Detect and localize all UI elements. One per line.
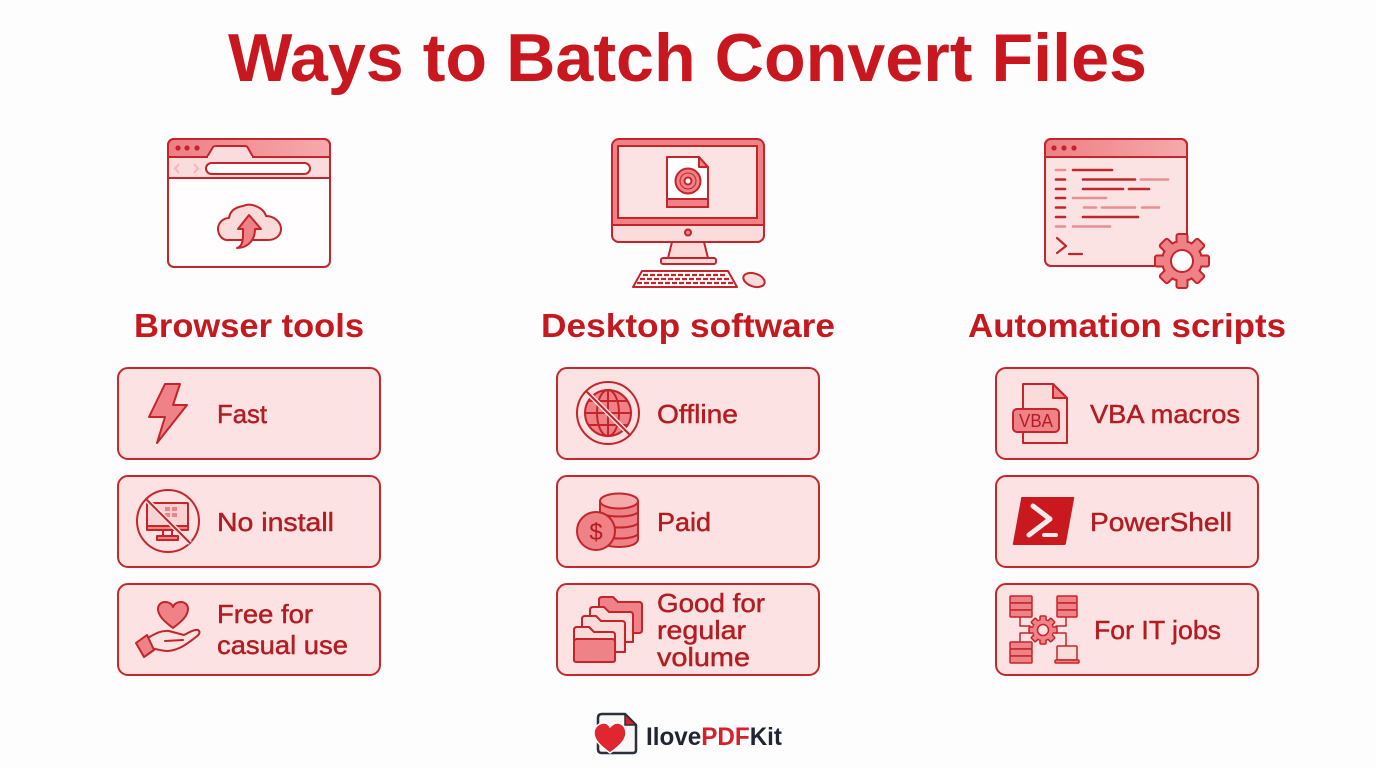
- icon: script window with gear: [1045, 139, 1209, 288]
- label: Free for casual use: [217, 599, 348, 660]
- icon: coins with dollar: $: [589, 519, 603, 546]
- icon: servers and gear network: [1010, 596, 1079, 663]
- card: VBA macros: [996, 368, 1258, 459]
- label: For IT jobs: For IT jobs: [1094, 615, 1221, 645]
- label: Good for regular volume: regular: [657, 615, 746, 645]
- label: Good for regular volume: Good for: [657, 588, 765, 618]
- card: Offline: [557, 368, 819, 459]
- card: Fast: [118, 368, 380, 459]
- icon: hand holding heart: [136, 602, 199, 657]
- label: VBA macros: VBA macros: [1090, 399, 1240, 429]
- label: PowerShell: PowerShell: [1090, 507, 1232, 537]
- card: PowerShell: [996, 476, 1258, 567]
- card: Paid: [557, 476, 819, 567]
- icon: desktop computer: [612, 139, 766, 290]
- label: Offline: Offline: [657, 399, 738, 429]
- label: Fast: Fast: [217, 399, 268, 429]
- title: Ways to Batch Convert Files: [228, 20, 1147, 96]
- icon: document with heart: [594, 714, 636, 753]
- icon: VBA file: VBA: [1019, 411, 1053, 431]
- icon: globe crossed out: [577, 382, 639, 444]
- heading: Browser tools: Browser tools: [134, 307, 364, 344]
- heading: Desktop software: Desktop software: [541, 307, 835, 344]
- icon: stack of folders: [574, 597, 642, 662]
- icon: no desktop install: [137, 490, 199, 552]
- heading: Automation scripts: Automation scripts: [968, 307, 1286, 344]
- label: Paid: Paid: [657, 507, 711, 537]
- label: Good for regular volume: [657, 588, 765, 672]
- icon: coins with dollar: [577, 494, 638, 550]
- icon: PowerShell logo: [1013, 497, 1074, 545]
- logo: IlovePDFKit: [594, 714, 783, 753]
- label: No install: No install: [217, 507, 334, 537]
- card: For IT jobs: [996, 584, 1258, 675]
- label: Free for casual use: casual use: [217, 630, 348, 660]
- wordmark: IlovePDFKit: [646, 723, 783, 751]
- label: Good for regular volume: volume: [657, 642, 750, 672]
- label: Free for casual use: Free for: [217, 599, 313, 629]
- icon: lightning bolt: [149, 384, 187, 443]
- card: No install: [118, 476, 380, 567]
- icon: browser window with cloud upload: [168, 139, 330, 267]
- card: Free for casual use: [118, 584, 380, 675]
- card: Good for regular volume: [557, 584, 819, 675]
- icon: VBA file: [1013, 384, 1067, 443]
